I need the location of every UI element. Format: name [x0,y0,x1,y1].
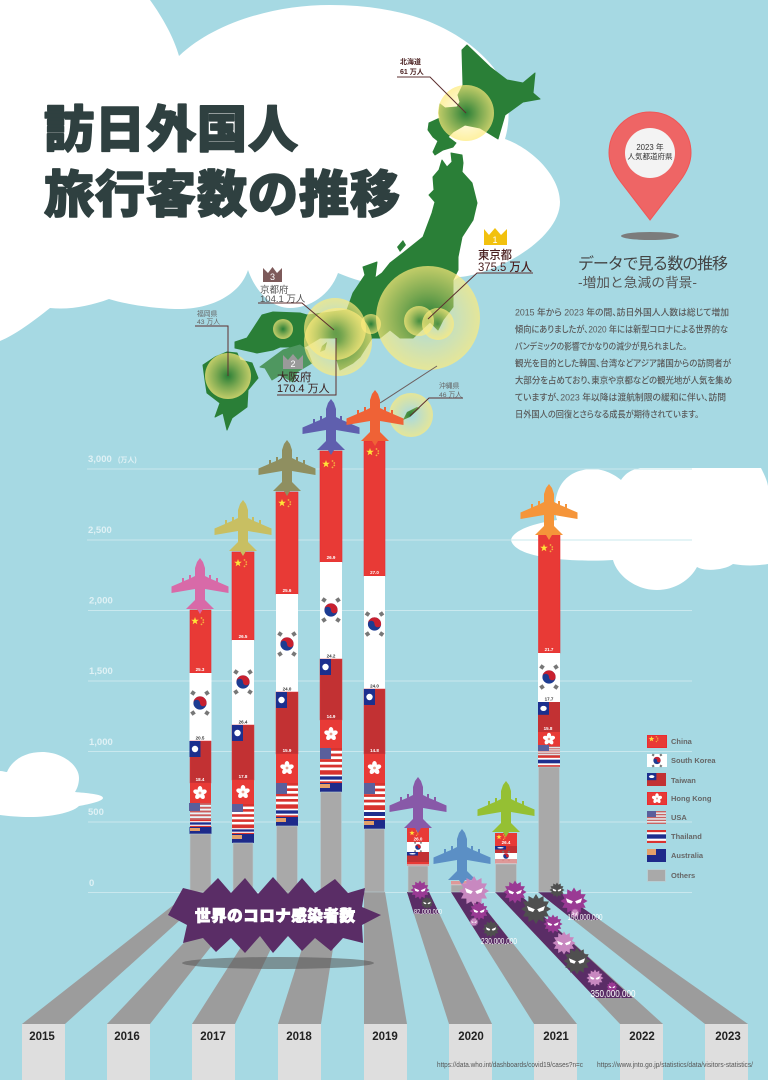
legend: South Korea: South Korea [671,756,716,765]
bar 2017 [276,492,298,892]
Honshu [235,153,477,370]
text block: background explanation: 傾向にありましたが、2020 年には新型コロナによる世界的な [515,324,728,334]
banner: world covid cases [168,877,381,953]
legend: Hong Kong: Hong Kong [671,794,712,803]
label: Okinawa [410,381,463,416]
label: Tokyo rank 1: 375.5 万人 [478,260,532,274]
title: 旅行客数の推移 [44,155,400,227]
bar 2020: 26.0 [414,836,423,842]
Kyushu [203,352,258,430]
bar 2016: 26.4 [239,720,248,724]
y axis with gridlines [87,454,692,892]
label: Kyoto rank 3: 京都府 [260,285,289,296]
heading: data trend: データで見る数の推移 [578,254,728,273]
label: Tokyo rank 1: 1 [492,235,498,245]
covid case numbers [414,909,636,1000]
icon: location pin: 2023 年 [636,142,664,152]
Shikoku [260,345,312,382]
bar 2015: 18.4 [196,777,205,782]
plane icons for each year [172,390,578,885]
Okinawa [403,407,420,420]
label: Osaka rank 2: 大阪府 [277,370,312,384]
year labels: 2019 [372,1031,398,1043]
source URLs: https://data.who.int/dashboards/covid19/cases?n=c [437,1062,583,1069]
label: Hokkaido: 北海道 [400,57,421,66]
y axis with gridlines: 500 [88,807,104,818]
bar 2023: 21.7 [545,647,554,652]
legend: China [648,736,693,748]
legend: Australia [647,849,704,862]
text block: background explanation: 2015 年から 2023 年の間、訪日外国人人数は総じて増加 [515,306,729,318]
source URLs [437,1062,753,1069]
bar 2016: 17.8 [239,774,248,779]
perspective strips to year labels [22,892,748,1024]
label: Okinawa: 沖縄県 [439,381,460,390]
year labels: 2022 [629,1031,655,1043]
text block: background explanation: ていますが、2023 年以降は渡航制限の緩和に伴い、訪問 [515,392,726,402]
bar 2023 [538,534,560,892]
legend: USA [647,811,687,824]
label: Osaka rank 2: 170.4 万人 [277,383,330,395]
banner: world covid cases: 世界のコロナ感染者数 [195,904,355,926]
label: Fukuoka: 福岡県 [197,309,218,318]
year labels: 2023 [715,1031,741,1043]
bar 2017: 24.0 [283,686,292,692]
y axis with gridlines: (万人) [118,456,137,464]
y axis with gridlines: 2,500 [88,525,112,536]
text block: background explanation: 大部分を占めており、東京や京都などの観光地が人気を集め [515,374,732,386]
label: Hokkaido [397,57,466,113]
label: Osaka rank 2: 2 [290,359,296,369]
bar 2017: 25.6 [283,588,292,593]
bar 2018: 24.2 [327,654,336,658]
Awaji [320,342,327,352]
year labels: 2016 [114,1031,140,1043]
year labels: 2021 [543,1031,569,1043]
legend [647,736,716,882]
y axis with gridlines: 3,000 [88,454,112,465]
text block: background explanation: 日外国人の回復とさらなる成長が期待されています。 [515,408,699,420]
label: Kyoto rank 3 [258,267,334,330]
bar 2015: 25.3 [196,667,205,672]
covid case numbers: 150,000,000 [568,913,603,922]
bar 2019: 24.0 [370,684,379,688]
bar 2022 [495,833,517,892]
label: Fukuoka: 43 万人 [197,318,220,326]
year labels: 2020 [458,1031,484,1043]
year labels: 2015 [29,1031,55,1043]
bar 2023: 17.7 [545,696,554,702]
text block: background explanation [515,306,732,420]
bar 2022: 26.4 [502,840,511,845]
label: Fukuoka [195,309,228,376]
bar 2019: 14.8 [370,748,379,753]
label: Okinawa: 46 万人 [439,391,462,399]
heading: data trend [578,254,728,290]
bar 2015: 20.5 [196,736,205,740]
heading: data trend: -増加と急減の背景- [578,275,697,290]
icon: location pin [609,112,691,240]
y axis with gridlines: 1,500 [89,666,113,677]
popularity circles [205,85,494,437]
covid case numbers: 82,000,000 [414,909,442,916]
text block: background explanation: 観光を目的とした韓国、台湾などアジア諸国からの訪問者が [515,358,731,368]
banner shadow [182,957,374,969]
y axis with gridlines: 0 [89,878,94,889]
legend: Others: Others [671,871,695,880]
bar 2017: 15.9 [283,748,292,753]
bar 2018: 14.9 [327,714,336,719]
legend: USA: USA [671,813,687,822]
label: Tokyo rank 1: 東京都 [478,247,512,262]
year labels: 2017 [200,1031,226,1043]
map of Japan [203,45,540,437]
bar 2018 [320,451,342,892]
Hokkaido [428,45,540,155]
label: Osaka rank 2 [277,338,336,395]
bar 2018: 26.9 [327,555,336,560]
virus icons [410,876,618,992]
bar 2020 [407,828,429,892]
legend: China: China [671,737,693,746]
title [44,90,400,227]
icon: location pin: 人気都道府県 [628,151,673,161]
bar 2019: 27.0 [370,570,379,575]
covid case numbers: 230,000,000 [481,937,517,946]
legend: Taiwan [647,773,696,786]
Sado [397,240,406,252]
legend: Thailand: Thailand [671,832,702,841]
y axis with gridlines: 1,000 [89,737,113,748]
year labels [22,1024,748,1080]
source URLs: https://www.jnto.go.jp/statistics/data/visitors-statistics/ [597,1062,753,1069]
year labels: 2018 [286,1031,312,1043]
bar 2019 [364,441,385,892]
legend: Australia: Australia [671,851,704,860]
cloud: right [511,468,768,590]
bar 2023: 15.8 [544,726,553,731]
label: Hokkaido: 61 万人 [400,68,424,76]
cloud: top left main [0,0,560,341]
covid case numbers: 350,000,000 [590,989,636,1000]
covid case bars on strips [407,892,633,998]
label: Tokyo rank 1 [428,228,533,319]
Okinawa inset line [380,366,437,403]
legend: South Korea [647,753,716,768]
label: Kyoto rank 3: 104.1 万人 [260,294,306,305]
bar 2021 [451,881,472,892]
label: Kyoto rank 3: 3 [270,272,275,282]
text block: background explanation: パンデミックの影響でかなりの減少が見られました。 [515,340,687,352]
title: 訪日外国人 [44,90,298,162]
legend: Thailand [647,830,702,843]
bar 2015 [189,610,212,892]
y axis with gridlines: 2,000 [89,596,113,606]
bar 2016: 26.5 [239,634,248,639]
cloud: left [0,752,103,817]
bar 2016 [232,552,254,892]
legend: Others [648,870,695,882]
legend: Taiwan: Taiwan [671,776,696,785]
legend: Hong Kong [648,792,712,804]
